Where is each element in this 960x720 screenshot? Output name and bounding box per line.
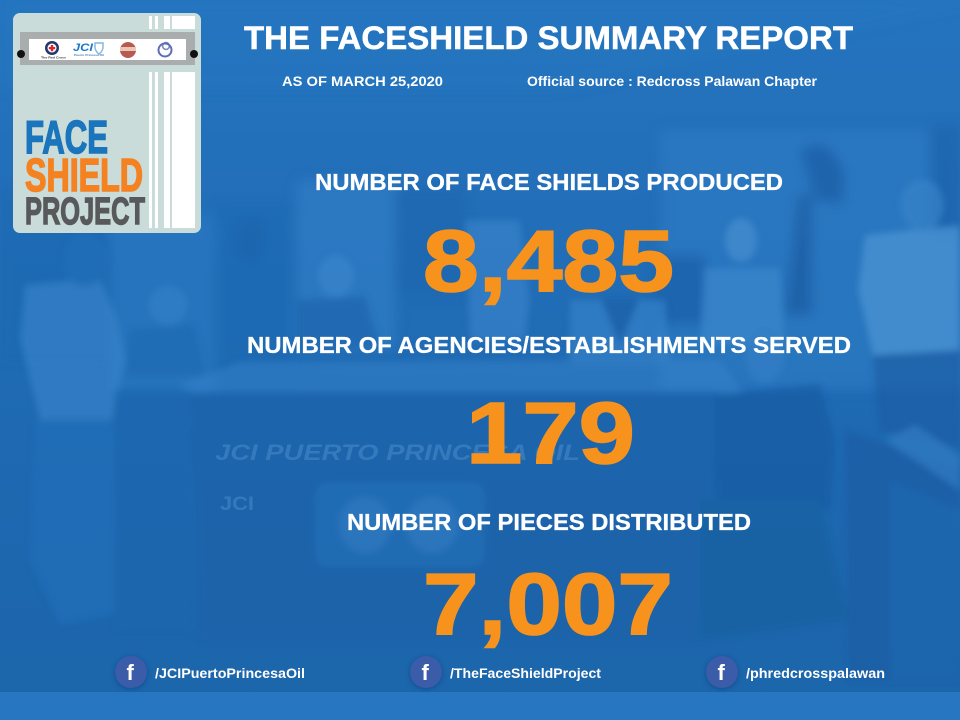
shield highlight stripes xyxy=(149,16,195,228)
project wordmark: FACE xyxy=(25,111,108,163)
logo panel: Face Shield Project xyxy=(13,13,201,233)
table top xyxy=(180,360,745,395)
headband with sponsor logos: JCI xyxy=(73,42,94,54)
right man xyxy=(858,225,960,355)
title: THE FACESHIELD SUMMARY REPORT xyxy=(244,20,853,56)
stat 2: agencies served xyxy=(247,332,851,482)
stat 1: face shields produced xyxy=(315,169,783,310)
date line: AS OF MARCH 25,2020 xyxy=(282,73,443,89)
source line: Official source : Redcross Palawan Chapter xyxy=(527,73,818,89)
icon: facebook: f xyxy=(126,660,134,685)
centre people xyxy=(465,220,530,340)
stat 1 heading: NUMBER OF FACE SHIELDS PRODUCED xyxy=(315,169,783,195)
seated people xyxy=(125,325,205,375)
icon: facebook: f xyxy=(718,660,726,685)
headband with sponsor logos xyxy=(17,32,198,65)
handle: /JCIPuertoPrincesaOil xyxy=(155,665,305,681)
project wordmark: SHIELD xyxy=(25,149,143,201)
seated man xyxy=(715,385,835,520)
stat 2 number: 179 xyxy=(466,385,635,482)
icon: facebook xyxy=(410,656,442,688)
social link: JCI Puerto Princesa Oil xyxy=(115,656,305,688)
headband with sponsor logos: The Red Cross xyxy=(41,56,66,60)
headband with sponsor logos: Puerto Princesa Oil xyxy=(74,53,104,57)
icon: facebook xyxy=(115,656,147,688)
background photo: blue-tinted group in a room: JCI xyxy=(220,494,254,515)
handle: /TheFaceShieldProject xyxy=(450,665,601,681)
mid right woman xyxy=(700,268,785,345)
stat 1 number: 8,485 xyxy=(423,213,674,310)
table skirt xyxy=(190,392,720,640)
footer band xyxy=(0,692,960,720)
stat 3 number: 7,007 xyxy=(423,556,673,653)
right furniture xyxy=(845,430,960,680)
box on table xyxy=(315,482,485,567)
social link: The Face Shield Project xyxy=(410,656,601,688)
social link: PH Red Cross Palawan xyxy=(706,656,885,688)
stat 2 heading: NUMBER OF AGENCIES/ESTABLISHMENTS SERVED xyxy=(247,332,851,358)
background photo: blue-tinted group in a room: JCI PUERTO PRINCESA OIL xyxy=(215,440,580,465)
left standing person xyxy=(20,278,125,420)
icon: facebook: f xyxy=(422,660,430,685)
project wordmark xyxy=(25,111,145,233)
project wordmark: PROJECT xyxy=(25,191,145,233)
handle: /phredcrosspalawan xyxy=(746,665,885,681)
stat 3 heading: NUMBER OF PIECES DISTRIBUTED xyxy=(347,509,751,535)
icon: facebook xyxy=(706,656,738,688)
stat 3: pieces distributed xyxy=(347,509,751,653)
